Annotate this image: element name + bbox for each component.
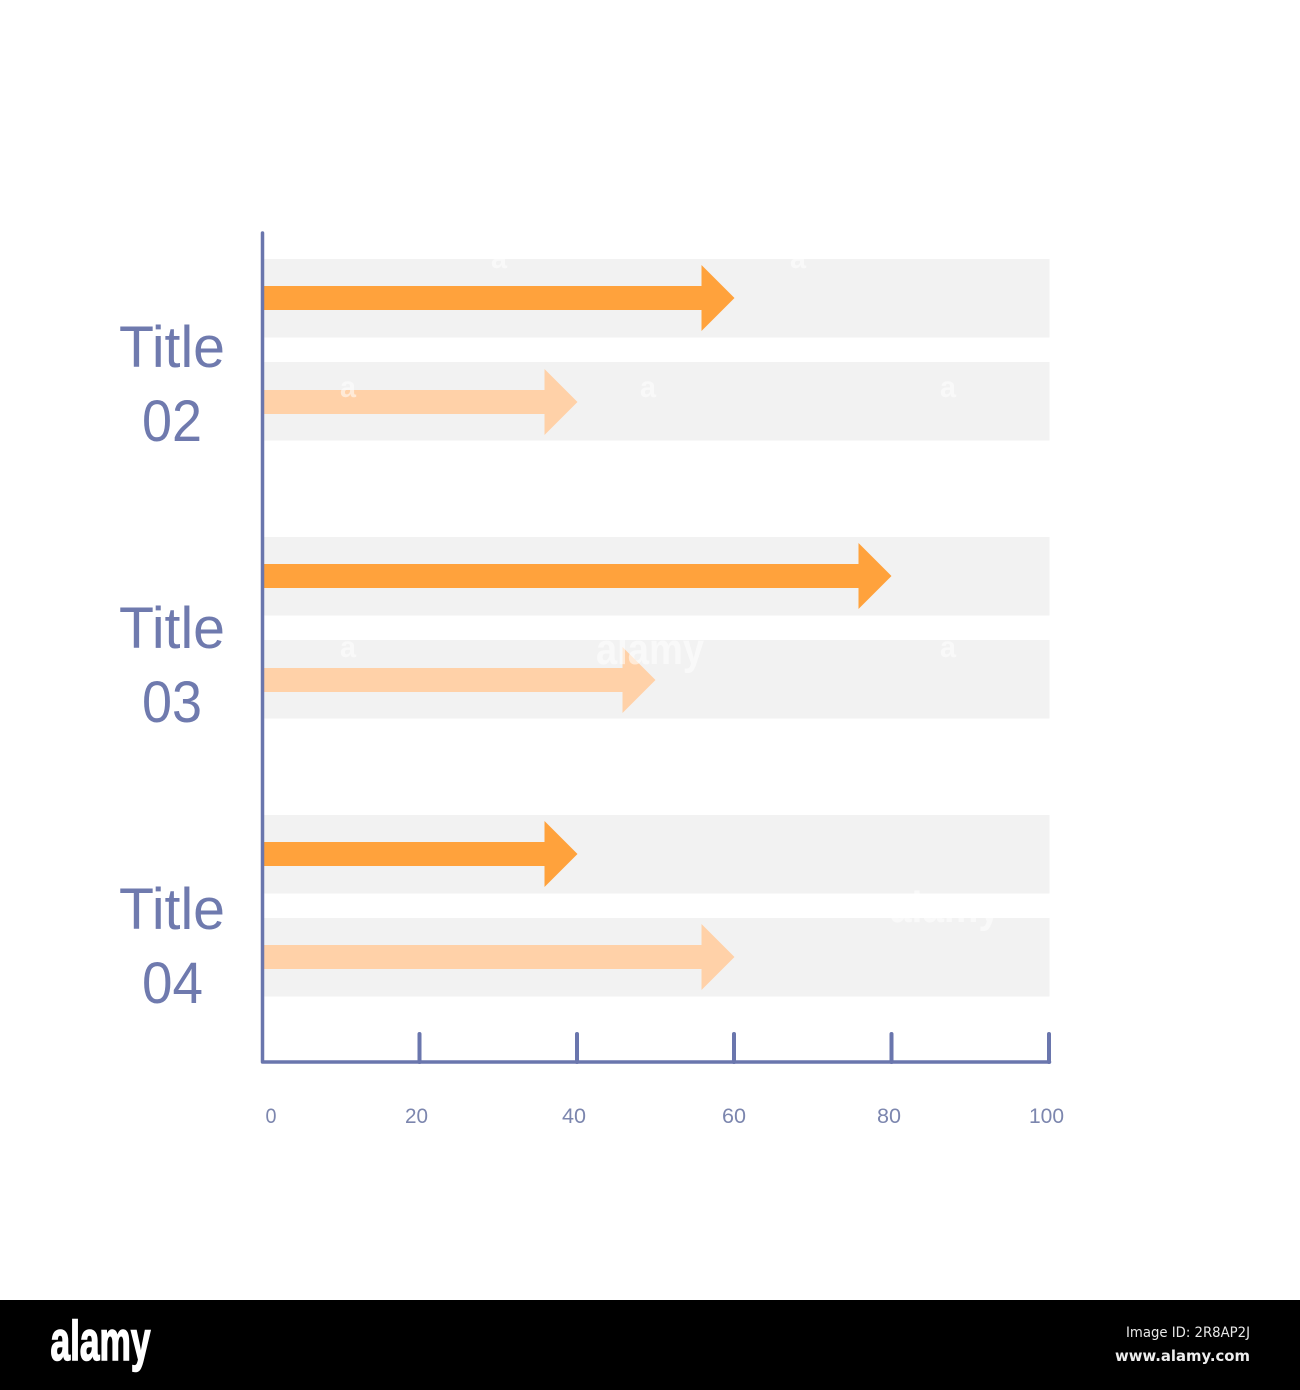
x axis labels: 40	[562, 1105, 586, 1128]
faint stock watermarks: alamy	[596, 625, 704, 674]
band: Title 03 second row	[264, 640, 1050, 718]
x axis labels: 0	[266, 1105, 276, 1128]
arrow: Title 02 light, value 40	[264, 369, 578, 435]
arrow: Title 03 light, value 50	[264, 647, 656, 713]
faint stock watermarks: a	[790, 242, 806, 275]
x axis labels	[266, 1105, 1064, 1128]
arrow: Title 02 dark, value 60	[264, 265, 734, 331]
faint stock watermarks: a	[940, 371, 956, 404]
band: Title 04 second row	[264, 918, 1050, 996]
axes with ticks	[262, 233, 1050, 1062]
band: Title 02 second row	[264, 362, 1050, 440]
footer bar	[0, 1300, 1300, 1390]
faint stock watermarks: a	[640, 371, 656, 404]
band: Title 03 first row	[264, 537, 1050, 616]
faint stock watermarks: alamy	[890, 883, 1000, 932]
faint stock watermarks	[340, 242, 1000, 932]
faint stock watermarks: a	[340, 371, 356, 404]
group: Title 03	[119, 537, 1050, 735]
arrow: Title 03 dark, value 80	[264, 543, 892, 609]
footer logo: alamy	[50, 1309, 150, 1372]
group: Title 04	[119, 815, 1050, 1016]
label: Title 04: Title	[119, 877, 225, 942]
label: Title 02	[119, 315, 225, 454]
faint stock watermarks: a	[340, 631, 356, 664]
label: Title 02: Title	[119, 315, 225, 380]
group: Title 02	[119, 259, 1050, 454]
band: Title 04 first row	[264, 815, 1050, 894]
x axis labels: 20	[405, 1105, 428, 1128]
x axis labels: 60	[722, 1105, 746, 1128]
footer url: www.alamy.com	[1115, 1347, 1250, 1365]
band: Title 02 first row	[264, 259, 1050, 338]
chart: grouped horizontal arrow bars	[119, 233, 1064, 1128]
faint stock watermarks: a	[491, 242, 507, 275]
label: Title 04	[119, 877, 225, 1016]
arrow: Title 04 light, value 60	[264, 924, 734, 990]
label: Title 03	[119, 596, 225, 735]
x axis labels: 100	[1029, 1105, 1064, 1128]
label: Title 02: 02	[142, 389, 202, 454]
footer image id: Image ID: 2R8AP2J	[1126, 1325, 1250, 1341]
label: Title 03: Title	[119, 596, 225, 661]
arrow: Title 04 dark, value 40	[264, 821, 578, 887]
label: Title 04: 04	[142, 951, 203, 1016]
label: Title 03: 03	[142, 670, 202, 735]
faint stock watermarks: a	[940, 631, 956, 664]
x axis labels: 80	[877, 1105, 901, 1128]
